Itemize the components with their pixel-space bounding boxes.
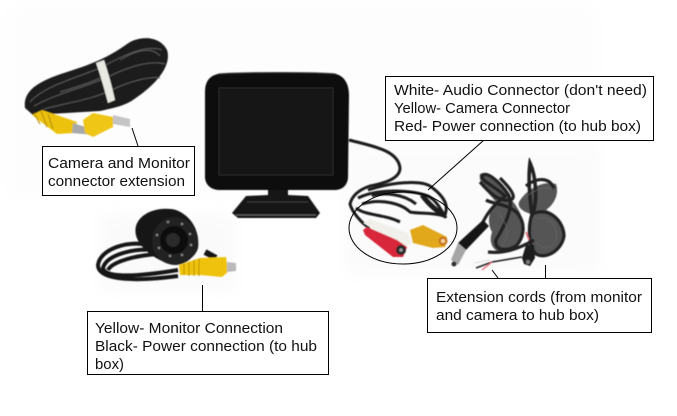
callout: camera and monitor extension: Camera and Monitor [48,155,190,172]
callout: extension cords: and camera to hub box) [436,307,599,324]
photo: coiled RCA extension cable [25,38,168,137]
monitor stand [232,188,320,218]
photo: RCA plugs [363,219,448,257]
callout: monitor connectors [386,76,654,140]
leader lines and ellipse [132,128,546,311]
callout: extension cords [428,278,652,332]
camera yellow plug [179,257,228,277]
callout: camera connections [88,312,328,374]
callout: monitor connectors: White- Audio Connector (don't need) [394,82,647,99]
callout: camera and monitor extension [42,146,194,196]
monitor screen [219,88,333,175]
photo: monitor [205,72,446,228]
yellow plugs [32,110,77,134]
left barrel plug [458,220,489,250]
callout: camera connections: box) [95,356,124,373]
cord coil masses [480,173,524,253]
bare wires [476,257,522,268]
callout: camera connections: Yellow- Monitor Connection [95,320,283,337]
callout: monitor connectors: Yellow- Camera Connector [394,100,570,117]
callout: extension cords: Extension cords (from monitor [436,289,642,306]
monitor body [205,72,349,190]
right barrel plug [522,245,535,266]
callout: camera and monitor extension: connector extension [48,173,185,190]
callout: camera connections: Black- Power connection (to hub [95,338,317,355]
photo: extension cords [451,163,564,270]
photo: rear-view camera [98,209,236,279]
monitor cable and coil [349,140,446,228]
white cable tie [96,60,115,103]
callout: monitor connectors: Red- Power connection (to hub box) [394,118,641,135]
